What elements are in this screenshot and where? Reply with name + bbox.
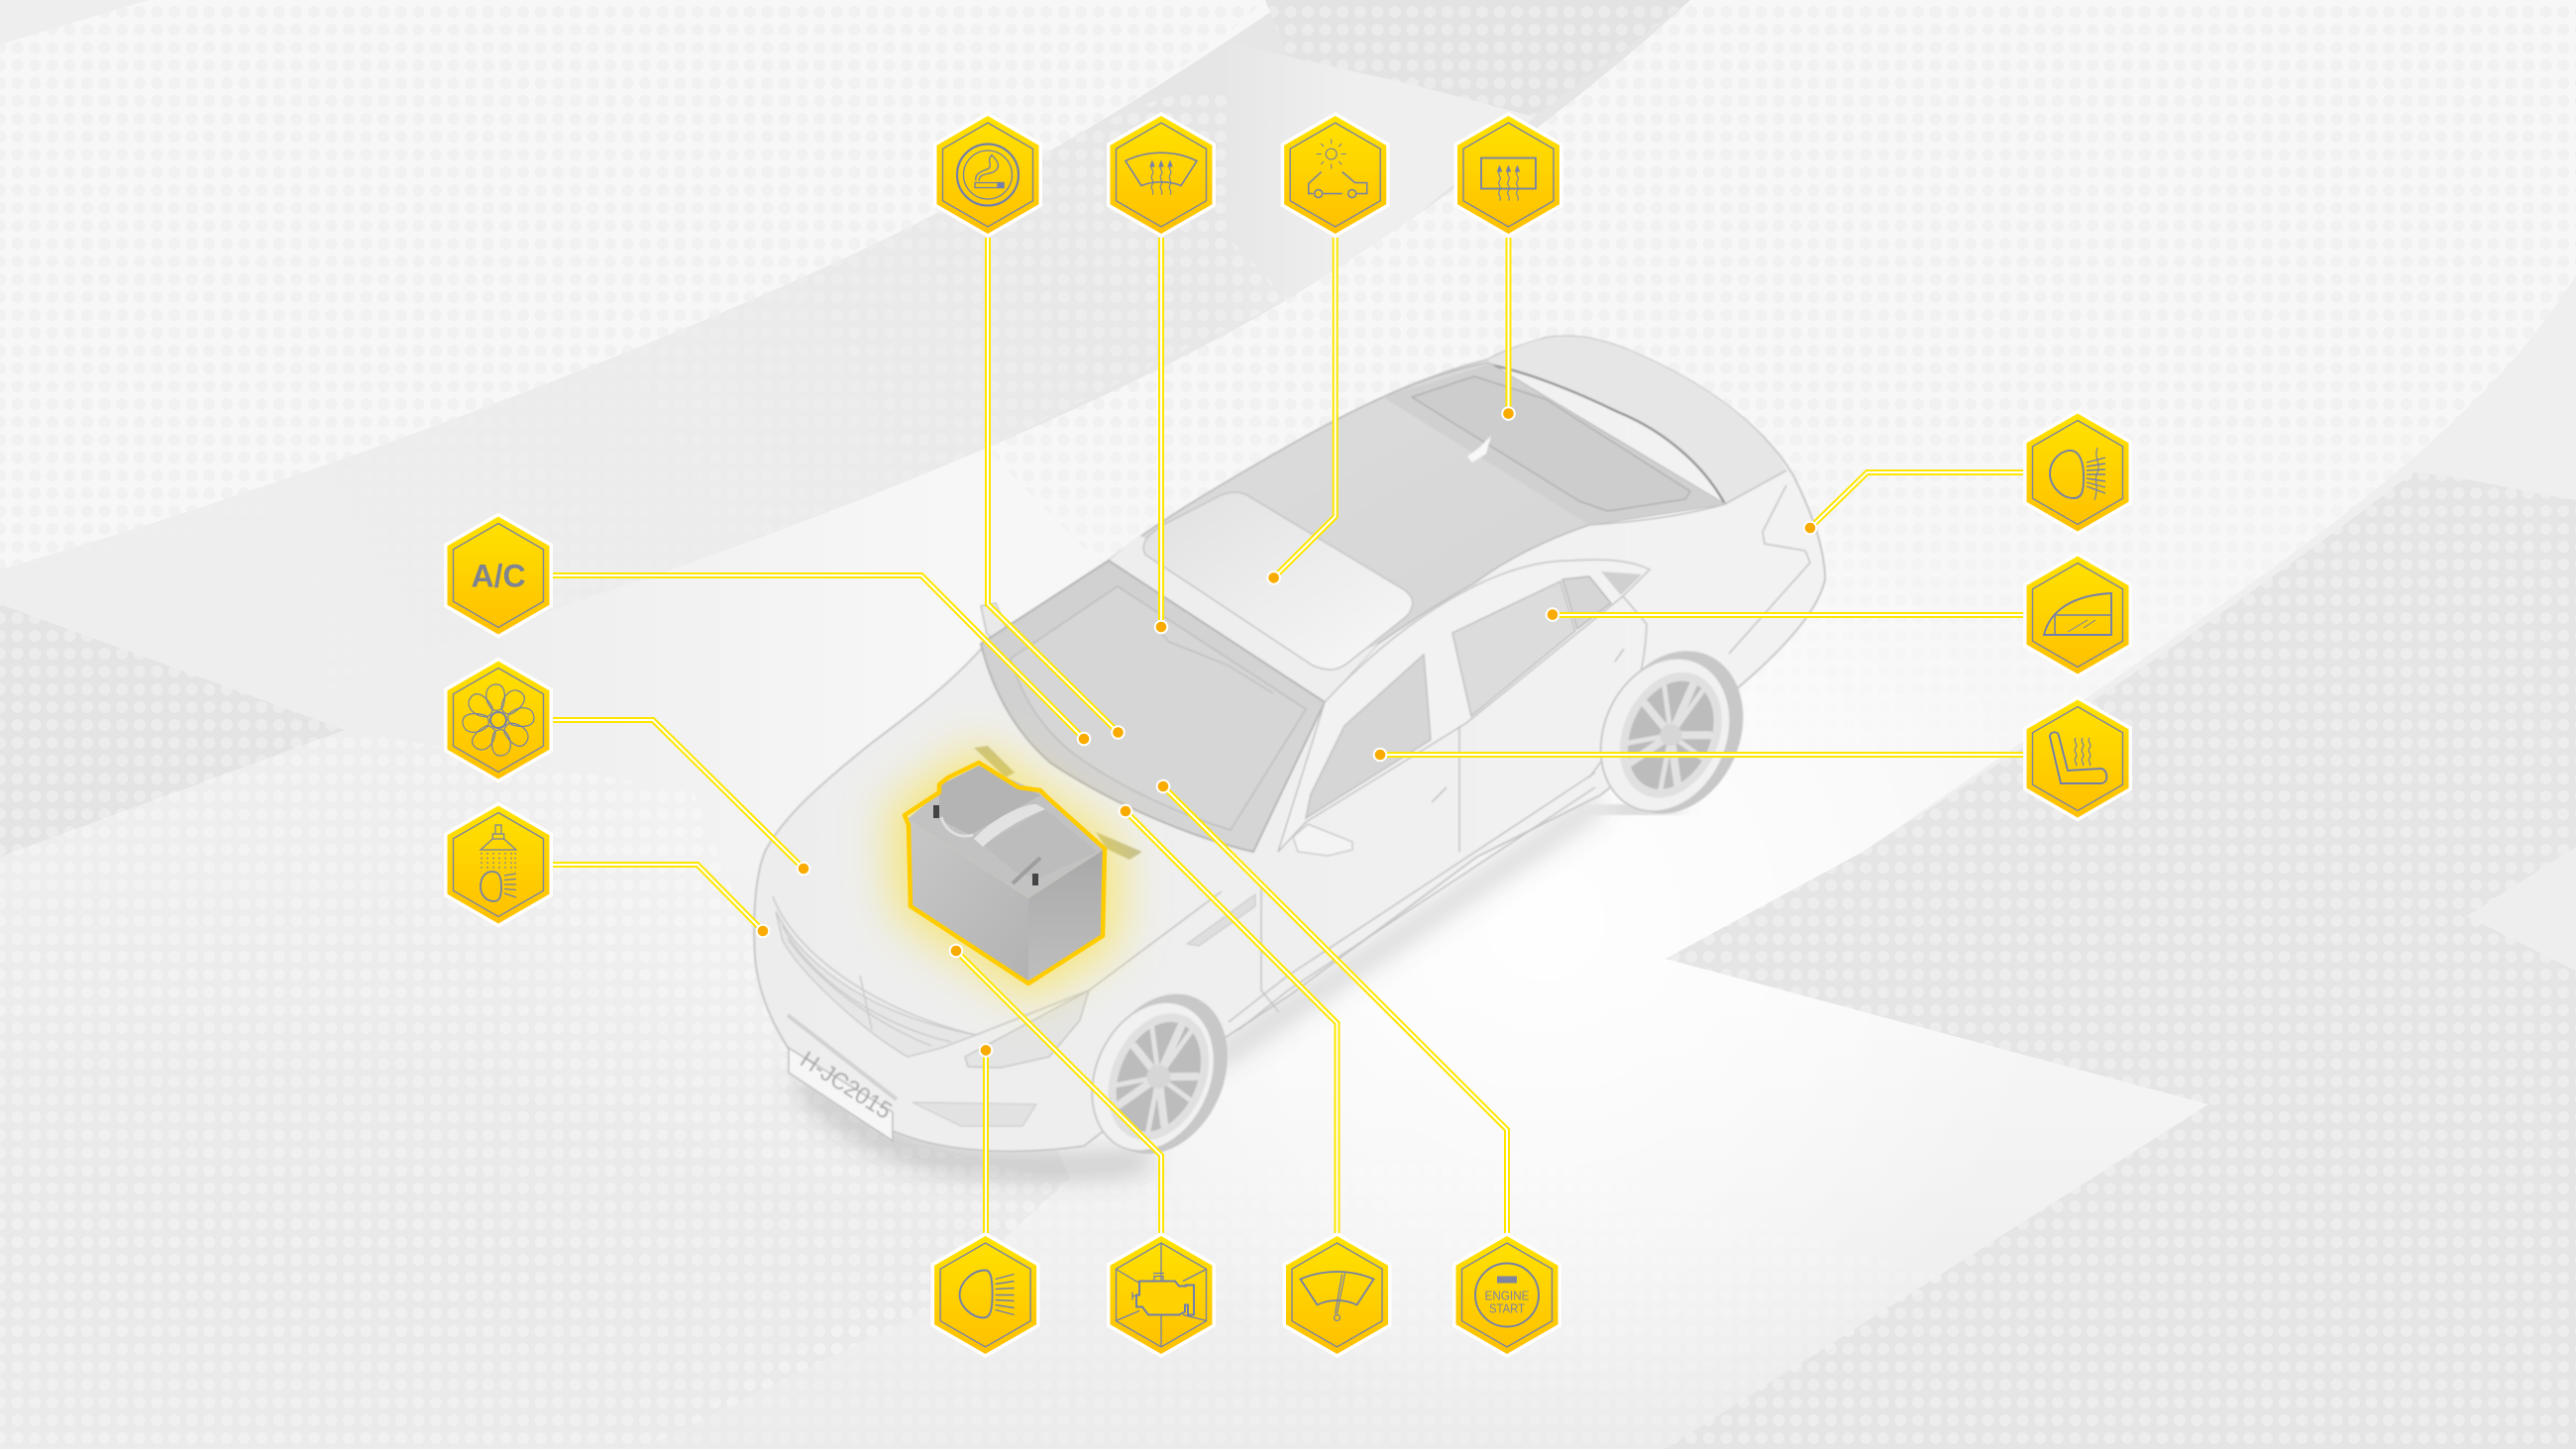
hexagon icon: engine start button: ENGINE: [1484, 1288, 1530, 1303]
headlight: [965, 990, 1089, 1068]
hexagon icon: A/C: [448, 517, 549, 634]
fender vent: [1187, 894, 1255, 946]
line: air conditioning: [553, 575, 1084, 739]
line: rear fog light: [1810, 472, 2023, 528]
hood outline: [773, 896, 1089, 1035]
front side window: [1306, 655, 1431, 818]
spoiler / boot lid: [1488, 337, 1786, 504]
line: engine: [956, 951, 1161, 1233]
battery glow: [905, 763, 1105, 983]
hexagon icon: engine: [1110, 1236, 1213, 1354]
hexagon icon: cigarette lighter: [937, 116, 1038, 234]
windshield: [981, 561, 1325, 852]
front wheel: [1069, 972, 1252, 1175]
hexagon icon: A/C: A/C: [471, 559, 526, 594]
connection dots: [757, 407, 1816, 1057]
car ground shadow: [803, 802, 1674, 1167]
line: engine start: [1163, 786, 1507, 1233]
hexagon icon: electric window: [2027, 557, 2128, 673]
hexagon icon: heated seat: [2027, 699, 2128, 818]
battery top: [908, 766, 1105, 898]
line: sun car: [1274, 238, 1336, 577]
roof: [1109, 362, 1725, 702]
line: rear window heater: [1506, 238, 1512, 414]
battery outline: [905, 763, 1105, 983]
hexagon icon: rear fog light: [2027, 414, 2128, 531]
battery terminals: [933, 805, 1038, 885]
side mirror: [1293, 824, 1352, 856]
window frame: [1278, 560, 1650, 852]
car left mirror: [981, 603, 1009, 646]
grille: [776, 911, 976, 1057]
hexagon icon: wiper: [1286, 1236, 1388, 1354]
hexagon icon: headlamp washer: [448, 806, 549, 923]
door lines and side panel details: [1089, 470, 1810, 1030]
car illustration: [754, 336, 1825, 1175]
quarter window: [1562, 576, 1611, 629]
fog lamp intake: [912, 1102, 1036, 1126]
rear window: [1383, 364, 1725, 525]
car body: [754, 336, 1825, 1151]
hexagon icon: windscreen heating: [1110, 116, 1213, 234]
line: seat/cigarette heater: [988, 238, 1118, 733]
battery left face: [908, 819, 1028, 983]
lower grille: [788, 1015, 897, 1099]
hexagon icon: low beam headlight: [934, 1236, 1036, 1354]
line: heated seat: [1380, 752, 2023, 758]
line: fan: [553, 720, 804, 869]
rear side window: [1452, 581, 1575, 716]
rear wheel: [1577, 628, 1769, 837]
hexagon icon: radiator fan: [448, 662, 549, 778]
leader lines: [553, 238, 2023, 1233]
line: windscreen heater: [1158, 238, 1164, 627]
licence plate: H-JC2015: [796, 1046, 897, 1125]
hexagon icon: engine start button: [1456, 1236, 1557, 1354]
battery: [905, 763, 1105, 983]
line: headlamp washer: [553, 865, 763, 931]
battery lid raised panels: [939, 766, 1040, 835]
hexagon icon: sun and car: [1284, 116, 1386, 234]
front roof header: [1109, 535, 1378, 702]
line: low beam: [983, 1050, 989, 1233]
battery handle: [974, 804, 1045, 847]
sunroof: [1143, 492, 1413, 670]
hood vents: [974, 746, 1142, 860]
line: wiper: [1126, 811, 1338, 1233]
line: door window: [1553, 612, 2023, 618]
battery right face: [1028, 849, 1105, 983]
hexagon icon: rear window heating: [1457, 116, 1559, 234]
hexagon icon: engine start button: START: [1489, 1301, 1525, 1315]
antenna: [1467, 436, 1491, 463]
